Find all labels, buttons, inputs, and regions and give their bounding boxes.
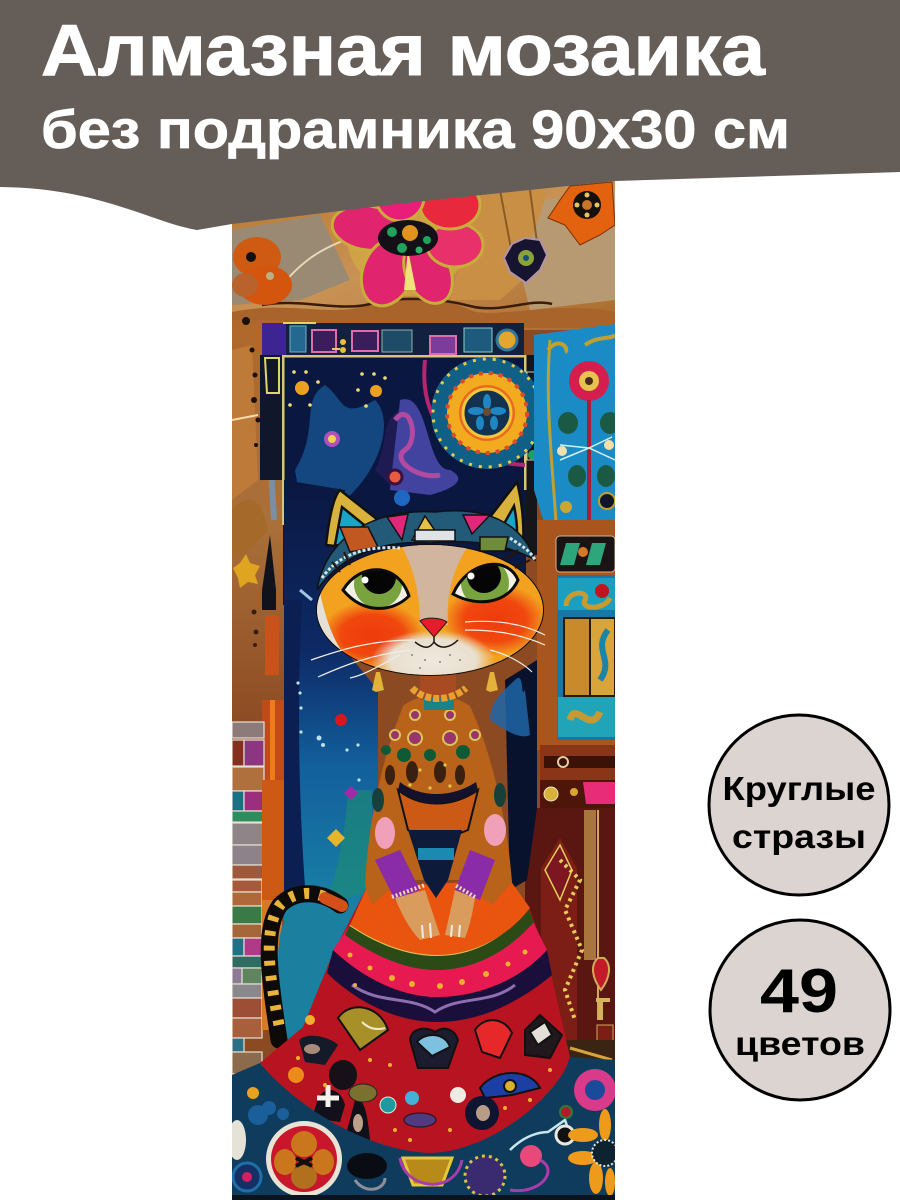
bricks left [232,722,284,1074]
orange flower left [232,237,292,305]
right side decorative panels [537,520,615,808]
cat nose and mouth [411,618,461,669]
bottom ornaments [228,1069,618,1200]
blue mural left of the cat [284,480,378,921]
dark background right of the cat [505,660,537,890]
orange flower top right [548,182,615,245]
cat face [316,544,544,676]
cat tail [269,893,342,1040]
cat headband [317,511,535,590]
cat whiskers [311,621,545,678]
cat dress [260,880,570,1153]
window night sky [282,355,526,605]
badge: 49 colours: цветов [735,1025,865,1062]
small purple flower [504,238,547,283]
banner shape [0,0,900,230]
teal area inside tail [278,921,348,1040]
window frame band [260,323,538,555]
badge: round rhinestones: Круглые [722,770,876,807]
badge: 49 colours: 49 [760,957,838,1026]
right bottom maroon panel [525,808,615,1065]
cat ears [326,482,523,550]
cat body [365,696,512,940]
mandala [431,357,543,469]
right blue panel [534,324,620,526]
badge: round rhinestones [709,715,889,895]
necklace [372,670,530,736]
badge: round rhinestones: стразы [732,818,866,855]
cat eyes [332,550,530,608]
big pink flower [330,195,484,308]
painting: cat in folk style [228,168,620,1200]
title line 2: без подрамника 90х30 см [41,100,790,160]
banner with title [0,0,900,230]
title line 1: Алмазная мозаика [41,11,766,91]
badge: 49 colours [710,920,890,1100]
left brown leather strip [232,317,284,780]
painting bottom floor [232,1057,615,1200]
painting top wall [232,170,615,330]
